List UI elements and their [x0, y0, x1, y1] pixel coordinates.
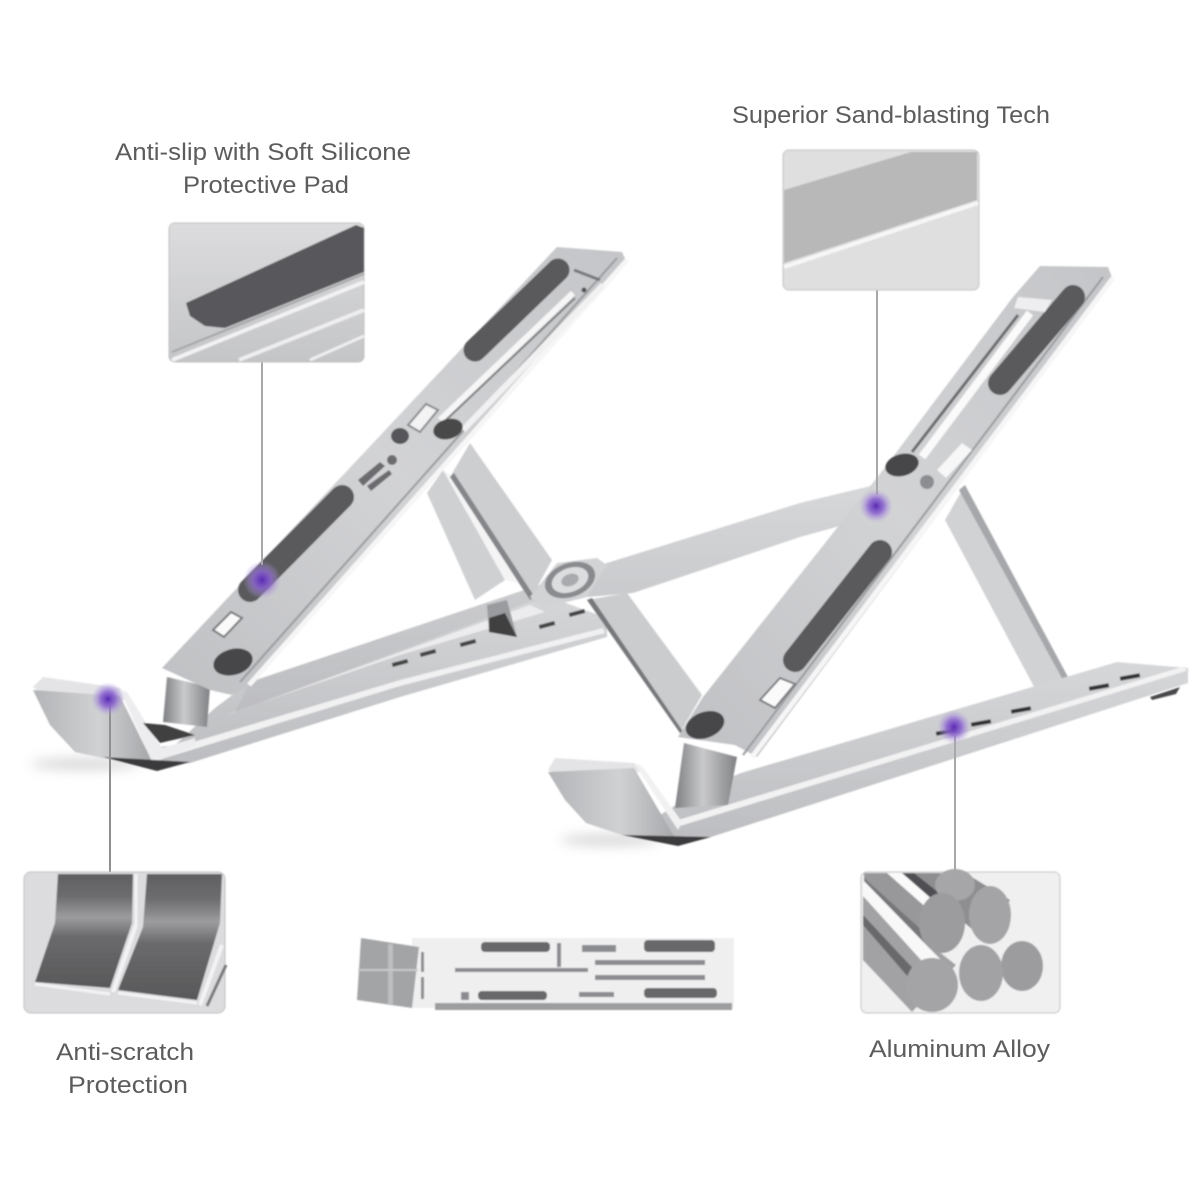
- label: anti-scratch: Protection: [68, 1072, 188, 1099]
- heading: anti-slip: [115, 139, 411, 199]
- label: aluminum alloy: Aluminum Alloy: [869, 1036, 1050, 1063]
- folded pads: [478, 940, 717, 1000]
- callout line: sand-blasting: [876, 290, 878, 495]
- right stand upper arm: [678, 266, 1113, 757]
- soft floor shadows: [30, 759, 660, 845]
- lower pad: [795, 552, 880, 660]
- engraved logo marks: [358, 455, 397, 491]
- center lower leg: [587, 593, 702, 733]
- hinge details: [883, 450, 921, 480]
- upper pad: [1000, 297, 1073, 383]
- hinge details: [431, 415, 465, 443]
- left stand base plate: [140, 590, 607, 765]
- heading: anti-slip: Protective Pad: [183, 172, 349, 199]
- right stand rear leg: [945, 485, 1076, 702]
- label: anti-scratch: Anti-scratch: [56, 1039, 194, 1066]
- slots: [440, 293, 573, 420]
- marker: aluminum: [937, 710, 971, 744]
- slots: [912, 315, 1018, 452]
- rod end faces: [906, 869, 1043, 1012]
- callout line: anti-scratch: [109, 705, 111, 872]
- base perforations: [936, 673, 1140, 736]
- left stand rear leg: [427, 470, 525, 600]
- laptop stand illustration: [30, 247, 1188, 846]
- label: anti-scratch: [56, 1039, 194, 1099]
- long cross bar: [235, 485, 880, 712]
- rear leg foot: [487, 600, 517, 637]
- cutouts: [760, 678, 795, 708]
- left stand upper leg: [450, 443, 552, 600]
- right stand hinge foot: [675, 743, 737, 808]
- left stand lip: [33, 677, 195, 771]
- inset: sand-blasting: [783, 150, 979, 290]
- center pivot: [530, 555, 607, 608]
- folded slots and marks: [421, 943, 705, 1000]
- lower pad: [250, 497, 342, 590]
- right stand base plate: [660, 662, 1188, 843]
- cutouts: [213, 612, 242, 637]
- inset: aluminum rods: [861, 869, 1060, 1013]
- marker: sand-blasting: [859, 489, 893, 523]
- left stand hinge foot: [163, 677, 210, 727]
- base perforations: [392, 609, 585, 667]
- marker: anti-scratch: [91, 682, 125, 716]
- heading: anti-slip: Anti-slip with Soft Silicone: [115, 139, 411, 166]
- right stand lip: [548, 758, 711, 846]
- heading: sand-blasting: Superior Sand-blasting Tech: [732, 102, 1050, 129]
- callout line: silicone pad: [261, 362, 263, 565]
- left stand upper arm: [162, 247, 627, 695]
- folded stand: [357, 938, 734, 1010]
- upper pad: [475, 270, 558, 350]
- rods: [863, 873, 1010, 1012]
- inset: silicone pad: [169, 223, 364, 362]
- callout line: aluminum: [954, 735, 956, 872]
- inset: anti-scratch: [24, 872, 226, 1013]
- marker: silicone pad: [243, 561, 281, 599]
